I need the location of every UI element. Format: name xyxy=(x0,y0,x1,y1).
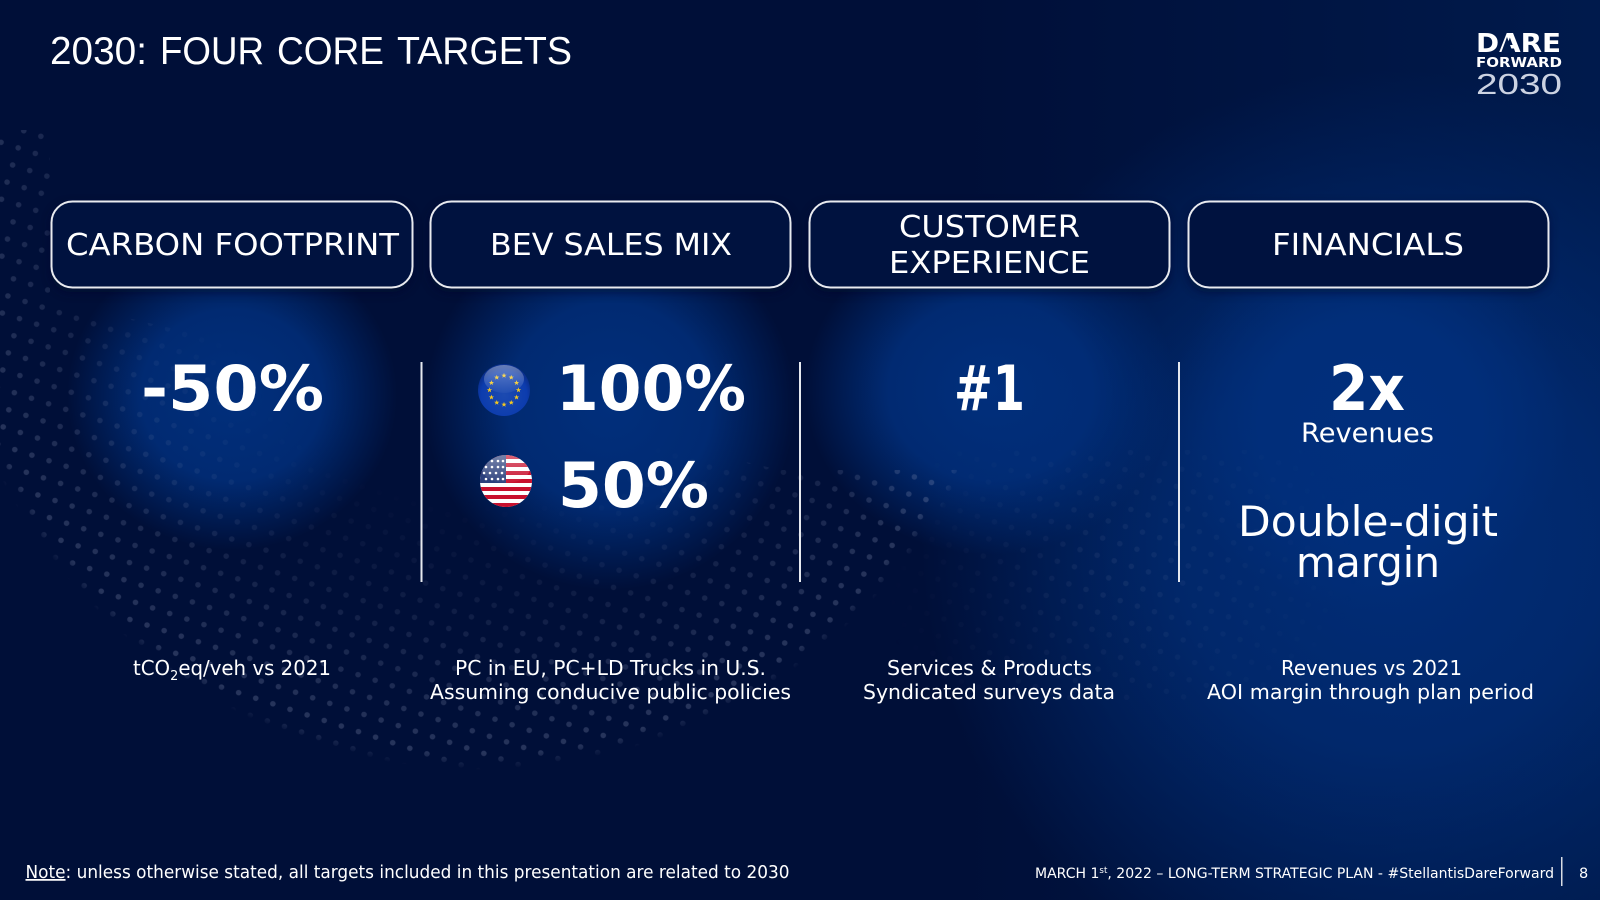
panel: customer experience header: CUSTOMER xyxy=(899,210,1080,245)
financials footnote: Revenues vs 2021 xyxy=(1281,656,1462,680)
panel: customer experience header: EXPERIENCE xyxy=(889,246,1090,281)
EU BEV target value: 100% xyxy=(556,352,746,425)
page number xyxy=(1561,857,1588,886)
financials footnote: AOI margin through plan period xyxy=(1207,680,1534,704)
customer experience footnote: Syndicated surveys data xyxy=(863,680,1115,704)
page number: 8 xyxy=(1579,866,1588,882)
note: Note: unless otherwise stated, all targets included in this presentation are related to 2030 xyxy=(26,863,790,883)
customer experience footnote: Services & Products xyxy=(887,656,1092,680)
footer text: st xyxy=(1099,866,1108,876)
carbon target value: -50% xyxy=(141,352,324,425)
carbon footnote: eq/veh vs 2021 xyxy=(178,656,331,680)
BEV footnote: Assuming conducive public policies xyxy=(430,680,791,704)
panel: carbon footprint header: CARBON FOOTPRINT xyxy=(66,228,400,263)
BEV footnote: PC in EU, PC+LD Trucks in U.S. xyxy=(455,656,766,680)
panel: BEV sales mix header xyxy=(430,202,791,292)
logo: Dare Forward 2030: DARE xyxy=(1476,29,1561,59)
panel: customer experience header xyxy=(809,202,1170,292)
financials value: margin: Double-digit xyxy=(1238,497,1498,546)
title: CORE xyxy=(277,30,384,73)
panel: BEV sales mix header: BEV SALES MIX xyxy=(490,228,732,263)
icon: EU flag xyxy=(478,364,530,416)
footer text: MARCH 1 xyxy=(1035,866,1102,882)
financials value: margin xyxy=(1238,497,1498,587)
financials value: revenues: 2x xyxy=(1329,352,1405,425)
financials value: margin: margin xyxy=(1296,538,1440,587)
BEV footnote xyxy=(430,656,791,704)
customer experience value: #1 xyxy=(954,352,1025,425)
panel: financials header xyxy=(1188,202,1549,292)
US BEV target value: 50% xyxy=(558,449,709,522)
column dividers xyxy=(422,362,1179,582)
title: TARGETS xyxy=(397,30,572,73)
carbon footnote: tCO xyxy=(133,656,171,680)
customer experience footnote xyxy=(863,656,1115,704)
panel: financials header: FINANCIALS xyxy=(1272,228,1464,263)
financials value: revenues xyxy=(1301,352,1434,449)
financials footnote xyxy=(1207,656,1534,704)
carbon footnote: 2 xyxy=(170,669,178,684)
logo: Dare Forward 2030: 2030 xyxy=(1476,69,1562,101)
financials value: revenues: Revenues xyxy=(1301,418,1434,449)
logo: Dare Forward 2030 xyxy=(1476,29,1562,101)
icon: US flag xyxy=(480,453,532,507)
footer text: , 2022 – LONG-TERM STRATEGIC PLAN - #StellantisDareForward xyxy=(1107,866,1554,882)
title: FOUR xyxy=(160,30,264,73)
logo: Dare Forward 2030: FORWARD xyxy=(1476,56,1562,71)
title: 2030: xyxy=(50,30,147,73)
panel: carbon footprint header xyxy=(51,202,412,292)
